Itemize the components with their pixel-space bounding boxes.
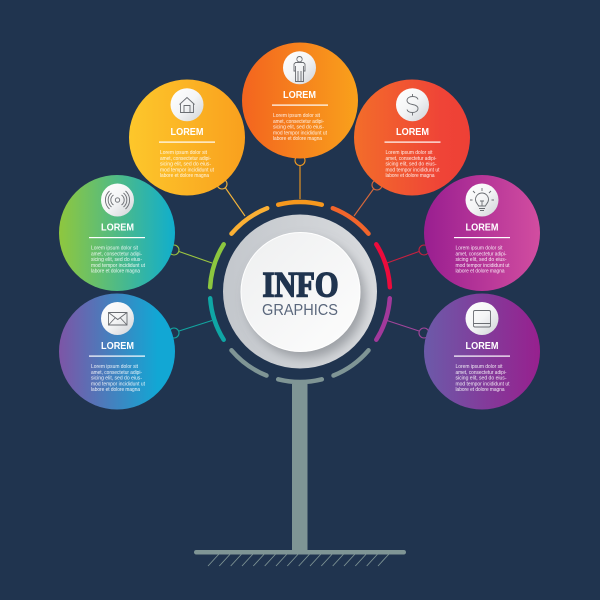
icon: signal [101,184,134,216]
heading: LOREM [170,126,204,138]
text block: labore et dolore magna [273,136,322,142]
text block: amet, consectetur adipi- [273,119,324,125]
text block: labore et dolore magna [91,269,140,275]
text block: amet, consectetur adipi- [386,156,437,162]
text block: sicing elit, sed do eius- [456,376,507,382]
connector: laptop [387,320,429,338]
ground base [194,550,406,566]
heading: LOREM [466,222,499,234]
text block: sicing elit, sed do eius- [91,376,142,382]
icon: mail [101,302,134,335]
text block: labore et dolore magna [91,387,140,393]
text block [273,113,328,142]
connector: dollar [354,180,382,216]
panel: dollar [354,80,470,196]
text block: mod tempor incididunt ut [456,263,510,269]
heading: LOREM [466,340,499,352]
text block [91,246,146,275]
icon: laptop [466,302,498,335]
panel: bulb [424,175,540,291]
text block: Lorem ipsum dolor sit [91,364,139,370]
panel: home [129,80,245,196]
text block: labore et dolore magna [386,173,435,179]
icon: person [283,51,316,84]
text block [91,364,146,393]
text block: mod tempor incididunt ut [273,130,328,136]
text block: mod tempor incididunt ut [91,263,146,269]
connector: mail [169,320,212,338]
text block: amet, consectetur adipi- [91,370,142,376]
connector: home [217,179,245,216]
icon: dollar [396,88,429,121]
panel: laptop [424,294,540,410]
text block: sicing elit, sed do eius- [273,125,324,131]
connector: person [295,156,305,199]
text block: amet, consectetur adipi- [456,251,507,257]
panel: signal [59,175,175,291]
stand post [292,384,308,552]
text block: Lorem ipsum dolor sit [91,246,139,252]
text block: Lorem ipsum dolor sit [386,150,433,156]
icon: home [170,88,204,121]
connector: bulb [387,245,429,263]
subtitle: GRAPHICS: GRAPHICS [262,302,338,319]
text block [456,246,510,275]
panel: mail [59,294,175,410]
text block: sicing elit, sed do eius- [386,162,437,168]
text block: mod tempor incididunt ut [386,167,440,173]
text block: amet, consectetur adipi- [91,251,142,257]
heading: LOREM [283,89,316,101]
text block: sicing elit, sed do eius- [91,257,142,263]
segmented ring [210,202,390,382]
text block: Lorem ipsum dolor sit [160,150,208,156]
text block: amet, consectetur adipi- [456,370,507,376]
text block: Lorem ipsum dolor sit [273,113,321,119]
panel: center hub [223,214,377,368]
text block: mod tempor incididunt ut [160,167,215,173]
text block: mod tempor incididunt ut [91,381,146,387]
heading: LOREM [101,222,134,234]
text block: Lorem ipsum dolor sit [456,246,503,252]
text block: labore et dolore magna [456,387,505,393]
panel: person [242,42,358,158]
heading: LOREM [396,126,429,138]
text block: sicing elit, sed do eius- [456,257,507,263]
text block [160,150,215,179]
icon: bulb [466,184,498,216]
title: INFO: INFO [262,264,338,304]
text block: amet, consectetur adipi- [160,156,211,162]
heading: LOREM [101,340,134,352]
text block [386,150,440,179]
text block: labore et dolore magna [160,173,209,179]
text block: sicing elit, sed do eius- [160,162,211,168]
text block [456,364,510,393]
text block: labore et dolore magna [456,269,505,275]
text block: mod tempor incididunt ut [456,381,510,387]
connector: signal [169,245,212,263]
text block: Lorem ipsum dolor sit [456,364,503,370]
